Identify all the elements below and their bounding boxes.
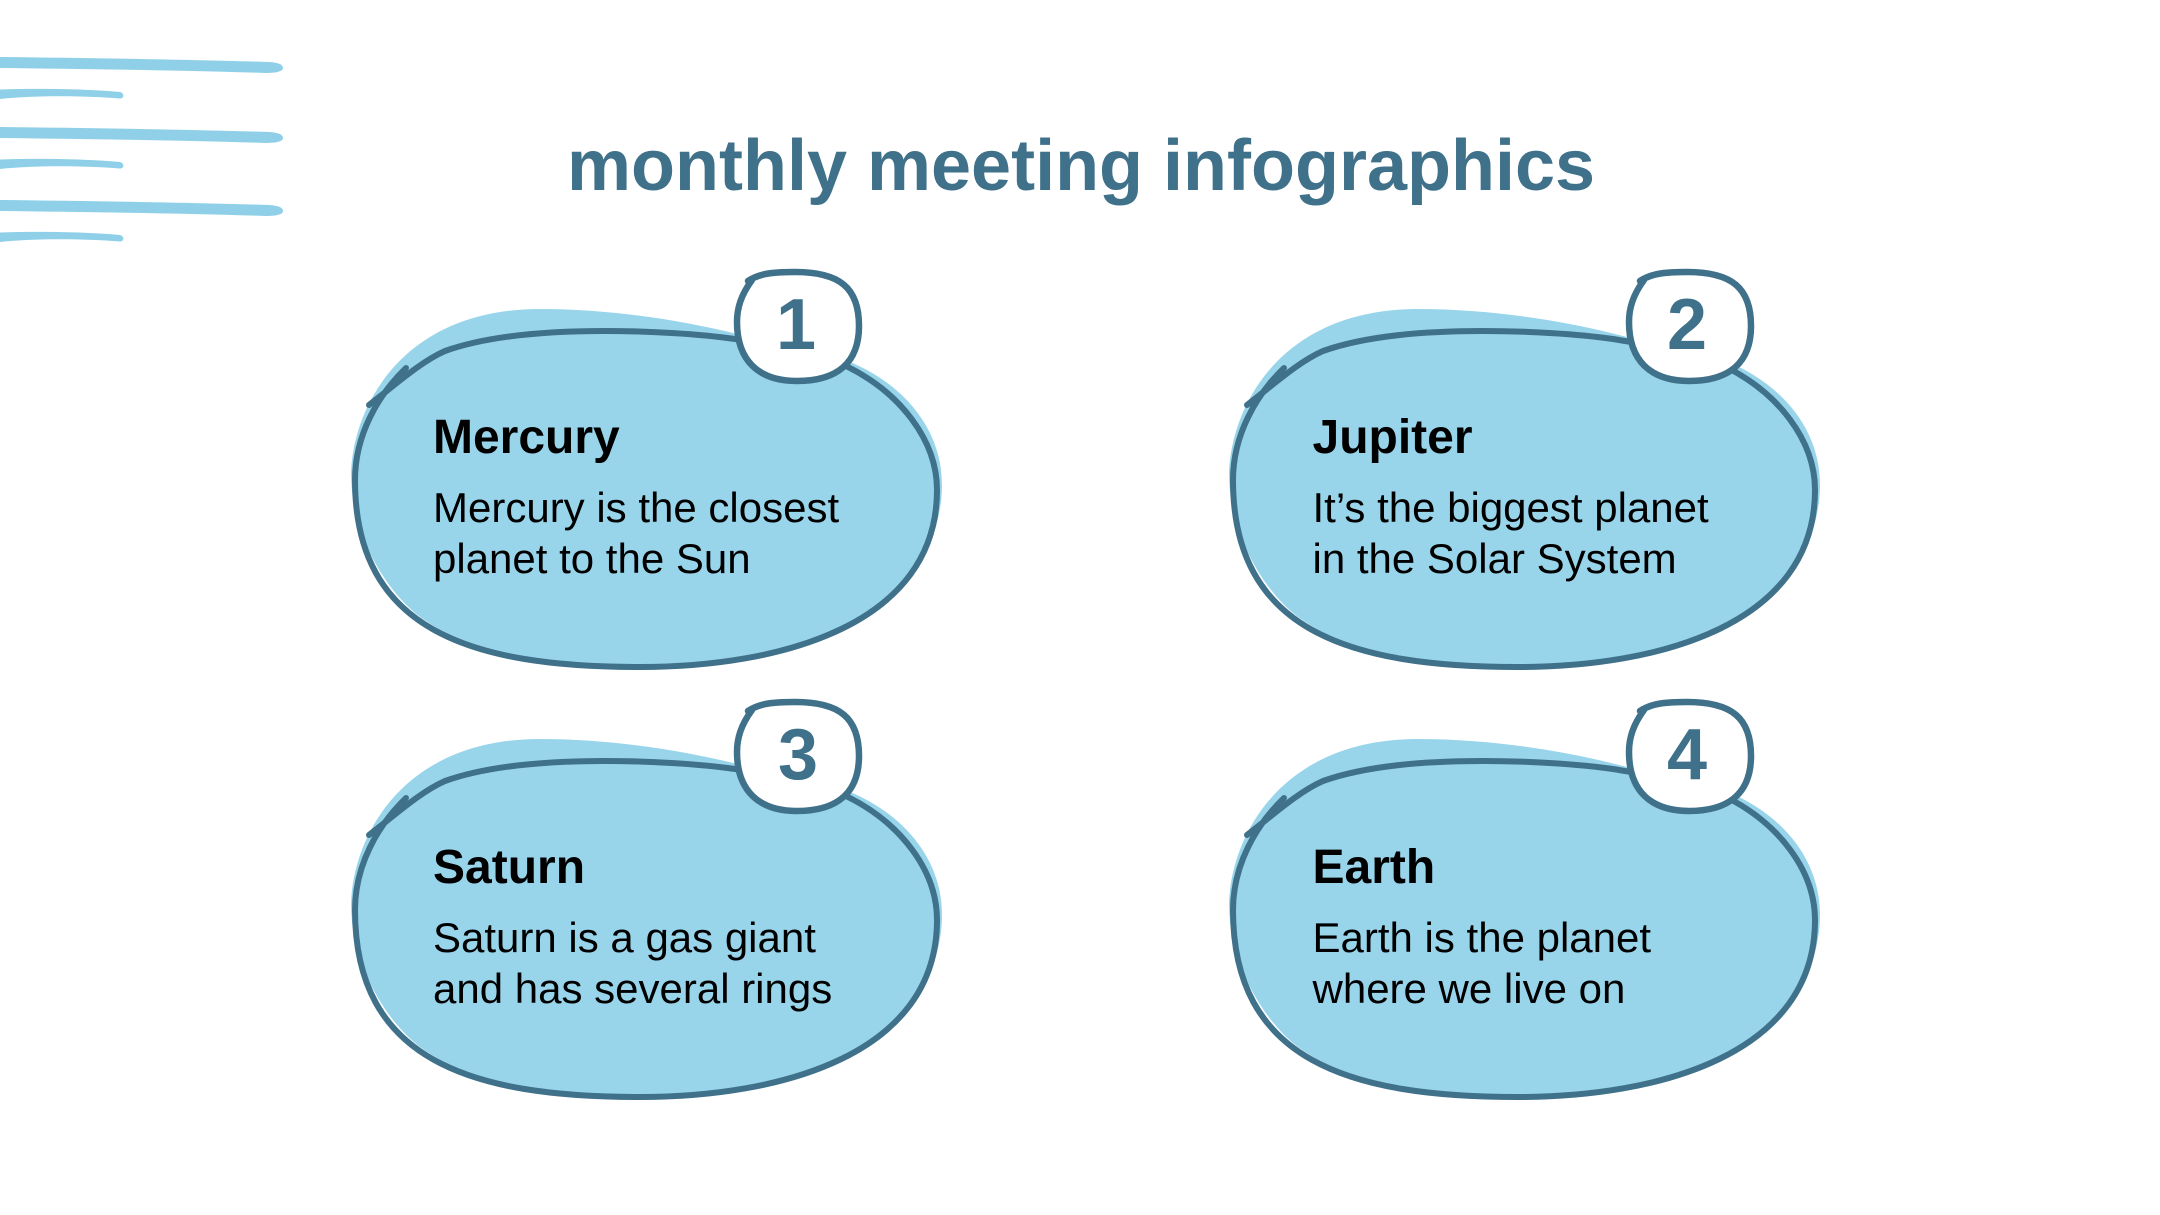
title: monthly meeting infographics (567, 126, 1595, 206)
heading: Saturn (433, 841, 585, 894)
description: Mercury is the closest (433, 484, 839, 531)
panel: Earth (1229, 702, 1820, 1097)
number: 1 (776, 285, 816, 365)
number: 3 (778, 715, 818, 795)
heading: Mercury (433, 411, 620, 464)
panel: Jupiter (1229, 272, 1820, 667)
number: 2 (1667, 285, 1707, 365)
heading: Earth (1312, 841, 1435, 894)
panel: Mercury (351, 272, 942, 667)
number badge (737, 702, 859, 811)
blob fill (1229, 309, 1820, 667)
blob outline (1233, 761, 1815, 1097)
blob outline (1233, 331, 1815, 667)
description: Saturn is a gas giant (433, 914, 816, 961)
panel: Saturn (351, 702, 942, 1097)
number badge (1629, 702, 1751, 811)
blob outline (355, 761, 937, 1097)
blob fill (1229, 739, 1820, 1097)
number badge (737, 272, 859, 381)
number: 4 (1667, 715, 1707, 795)
description: Earth is the planet (1312, 914, 1651, 961)
description: It’s the biggest planet (1312, 484, 1709, 531)
blob fill (351, 739, 942, 1097)
heading: Jupiter (1312, 411, 1473, 464)
blob fill (351, 309, 942, 667)
blob outline (355, 331, 937, 667)
description: in the Solar System (1312, 535, 1677, 582)
description: planet to the Sun (433, 535, 751, 582)
number badge (1629, 272, 1751, 381)
description: where we live on (1312, 965, 1625, 1012)
description: and has several rings (433, 965, 832, 1012)
decoration: sketched lines (0, 57, 283, 242)
